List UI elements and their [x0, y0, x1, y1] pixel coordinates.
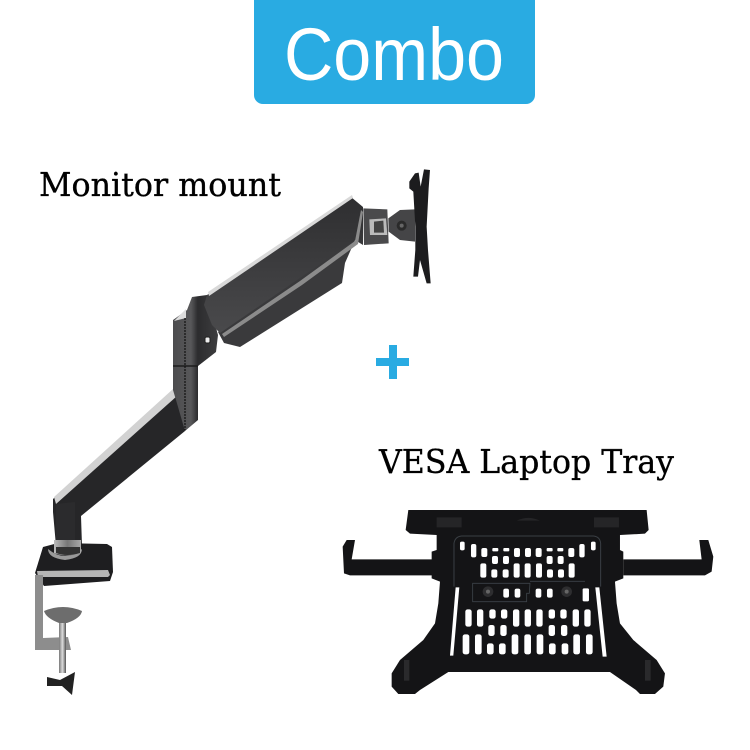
title text: Combo	[284, 13, 504, 96]
tray side arm right	[623, 540, 713, 575]
label: VESA laptop tray: VESA Laptop Tray	[378, 442, 674, 481]
lower arm	[53, 380, 198, 546]
tray tabs and screws	[437, 517, 619, 527]
tray raised edge	[454, 536, 601, 587]
icon: plus sign	[376, 345, 409, 379]
lower fin of upper arm	[218, 238, 356, 347]
tilt head and VESA plate	[363, 169, 431, 283]
tray centre bracket	[473, 581, 585, 602]
laptop tray	[343, 510, 713, 694]
upper gas spring arm	[204, 195, 363, 337]
label: monitor mount: Monitor mount	[39, 165, 281, 204]
elbow joint	[173, 295, 218, 431]
tray slots	[450, 542, 607, 657]
tray plate	[392, 510, 665, 694]
title badge	[254, 0, 535, 104]
monitor mount arm	[35, 169, 431, 695]
C-clamp	[35, 575, 82, 695]
desk base	[35, 540, 113, 586]
tray side arm left	[343, 540, 433, 575]
